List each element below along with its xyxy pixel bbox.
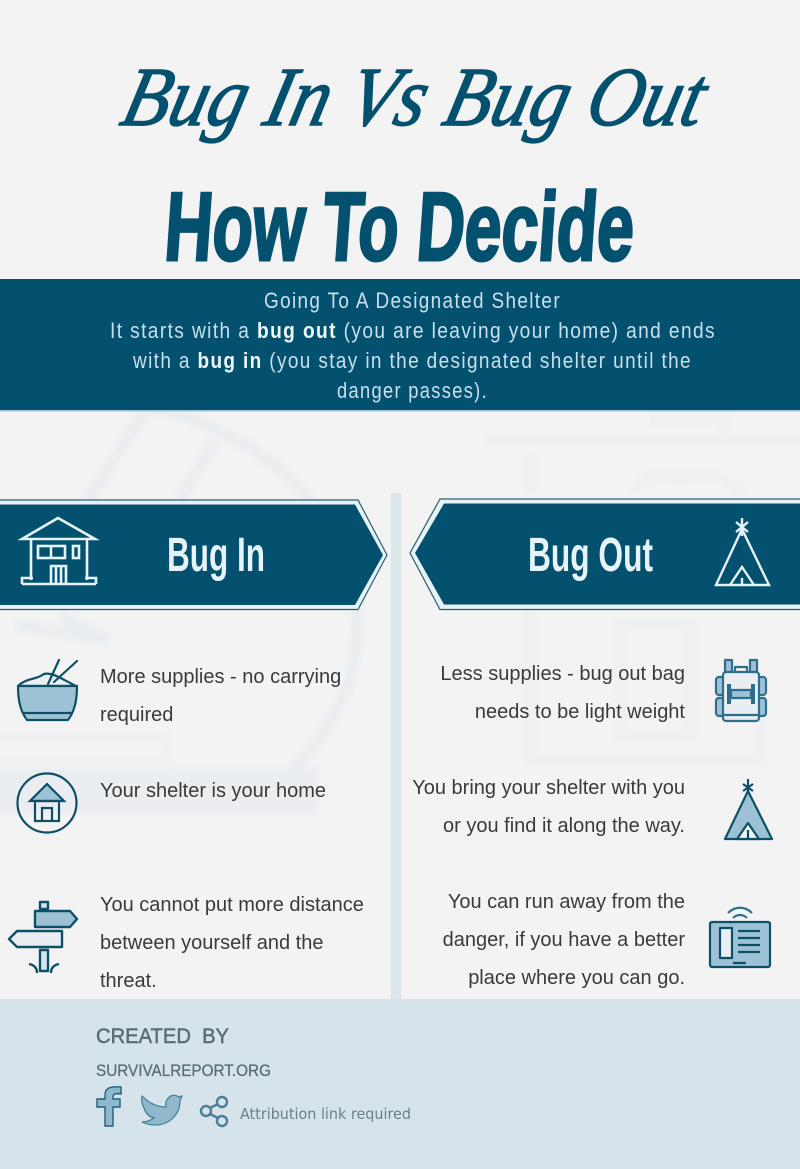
bug in item 1 <box>18 660 341 726</box>
intro banner <box>0 279 800 412</box>
icon: house <box>22 518 96 584</box>
created by: CREATED BY <box>96 1025 229 1048</box>
intro text: Going To A Designated Shelter <box>264 288 561 313</box>
center divider <box>391 493 401 999</box>
bug in item 3 <box>9 894 364 992</box>
text: place where you can go. <box>468 967 685 989</box>
text: required <box>100 704 173 726</box>
text: More supplies - no carrying <box>100 666 341 688</box>
bug out item 1 <box>440 660 766 723</box>
heading: Bug In: Bug In <box>167 529 265 582</box>
header arrow: Bug Out <box>410 499 800 610</box>
intro text: danger passes). <box>337 378 488 403</box>
icon: facebook <box>97 1087 121 1126</box>
watermark: left background compass <box>0 408 357 814</box>
intro text <box>110 288 716 403</box>
icon: rice bowl <box>18 660 77 720</box>
text: You cannot put more distance <box>100 894 364 916</box>
bug out item 2 <box>412 777 772 839</box>
text: Your shelter is your home <box>100 780 326 802</box>
text: threat. <box>100 970 157 992</box>
icon: tipi <box>716 518 769 585</box>
icon: twitter <box>142 1095 182 1125</box>
watermark: right background building <box>484 420 800 760</box>
icon: share <box>201 1097 227 1126</box>
bug out item 3 <box>443 891 770 989</box>
heading: Bug Out: Bug Out <box>528 529 653 582</box>
attribution: Attribution link required <box>240 1105 411 1123</box>
text: danger, if you have a better <box>443 929 685 951</box>
intro text: It starts with a bug out (you are leaving your home) and ends <box>110 318 716 343</box>
title: Bug In Vs Bug Out: Bug In Vs Bug Out <box>113 51 718 144</box>
icon: tipi filled <box>725 779 772 839</box>
site name: SURVIVALREPORT.ORG <box>96 1061 271 1080</box>
text: or you find it along the way. <box>443 815 685 837</box>
icon: signpost <box>9 902 77 973</box>
icon: backpack <box>716 660 766 721</box>
footer panel <box>0 999 800 1169</box>
text: Less supplies - bug out bag <box>440 663 685 685</box>
bug in item 2 <box>18 774 326 832</box>
text: You bring your shelter with you <box>412 777 685 799</box>
icon: tablet with wifi <box>710 908 770 967</box>
intro text: with a bug in (you stay in the designated shelter until the <box>132 348 692 373</box>
text: between yourself and the <box>100 932 324 954</box>
text: needs to be light weight <box>475 701 685 723</box>
header arrow: Bug In <box>0 500 387 610</box>
text: You can run away from the <box>448 891 685 913</box>
icon: home in circle <box>18 774 76 832</box>
